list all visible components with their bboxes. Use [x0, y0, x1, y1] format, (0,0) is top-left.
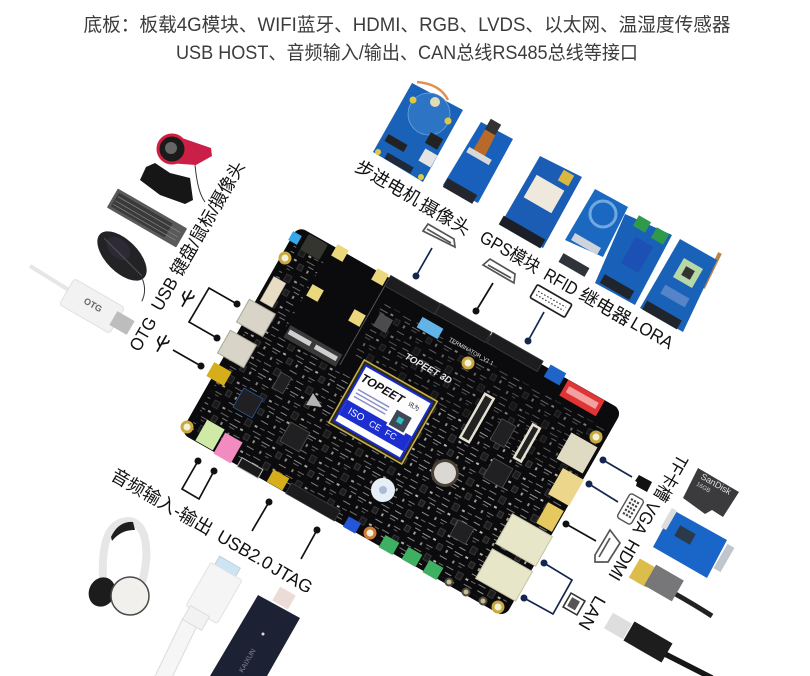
connector: camera header line and icon [412, 224, 455, 280]
connector: rfid header line and icon [524, 285, 572, 344]
icon: lan [563, 593, 585, 615]
label: USB 键盘/鼠标/摄像头: USB 键盘/鼠标/摄像头 [147, 158, 249, 314]
blue jumper [343, 516, 361, 534]
development board [180, 226, 622, 617]
pin header [237, 458, 263, 478]
label: JTAG: JTAG [268, 558, 316, 598]
tf socket [557, 433, 597, 473]
cpu core module: ISO [346, 406, 366, 424]
lan ports [476, 514, 552, 601]
board silk text [402, 337, 494, 387]
hdmi sockets [536, 468, 584, 532]
icon: tf card [635, 475, 652, 492]
peripheral: stepper motor board [373, 82, 463, 182]
connector: jtag line [301, 526, 320, 559]
mini pcie slot [283, 325, 343, 367]
label: GPS模块: GPS模块 [476, 227, 544, 277]
connector: otg line [173, 350, 204, 370]
cpu core module: TOPEET [358, 371, 408, 407]
sticker logo [417, 317, 443, 339]
connector: usb2.0 line [252, 498, 272, 531]
jtag socket [286, 483, 340, 521]
label: 音频输入-输出: 音频输入-输出 [108, 465, 216, 539]
mounting holes [182, 253, 601, 612]
green terminals [379, 535, 443, 580]
board pcb [180, 226, 622, 617]
fpc connectors [460, 394, 540, 461]
connector: usb bracket [189, 288, 240, 342]
connector: lan bracket [520, 560, 572, 614]
chips [233, 313, 516, 544]
audio jacks [195, 420, 243, 463]
peripheral: rfid board [559, 189, 628, 277]
warning triangle [306, 393, 322, 407]
fpc socket [260, 276, 286, 308]
cpu core module: CE [367, 418, 383, 433]
label: VGA: VGA [629, 498, 663, 538]
icon: usb symbol [178, 288, 196, 309]
label: 摄像头: 摄像头 [416, 195, 474, 239]
connector: audio bracket [182, 458, 218, 499]
connector: vga line [586, 480, 618, 502]
peripheral: sd card [683, 468, 739, 517]
label: USB2.0: USB2.0 [214, 526, 276, 574]
connector: tf line [600, 456, 632, 477]
usb ports [218, 299, 275, 368]
blue potentiometer [544, 364, 566, 386]
peripheral: hdmi dongle [210, 587, 300, 676]
peripheral: hdmi plug [629, 558, 712, 616]
board silk text: TERMINATOR_V1.1 [448, 337, 494, 367]
label: LAN: LAN [574, 592, 610, 634]
cpu core module: FC [383, 427, 399, 442]
peripheral: keyboard [107, 188, 187, 248]
peripheral: camera board [443, 119, 513, 204]
peripheral: hdmi dongle: KAIXUN [238, 648, 258, 674]
connector: gps header line and icon [472, 259, 515, 314]
label: OTG: OTG [125, 313, 161, 355]
title [84, 14, 730, 64]
peripheral: sd card: SanDisk [699, 471, 733, 497]
title: USB HOST、音频输入/输出、CAN总线RS485总线等接口 [176, 42, 638, 64]
label: TF卡槽: TF卡槽 [650, 451, 692, 505]
label: HDMI: HDMI [604, 536, 644, 584]
dc jack [300, 234, 328, 260]
peripheral: micro usb cable [162, 556, 242, 676]
peripheral: webcam [140, 135, 212, 204]
coin battery [431, 459, 459, 487]
title: 底板：板载4G模块、WIFI蓝牙、HDMI、RGB、LVDS、以太网、温湿度传感器 [84, 14, 730, 36]
peripheral: ethernet plug [604, 613, 712, 676]
peripheral: headphone [84, 521, 149, 615]
peripheral: otg cable [30, 266, 135, 335]
connector: hdmi line [562, 520, 596, 541]
top expansion headers [385, 275, 543, 372]
board silk text: TOPEET 3D [402, 351, 454, 387]
tactile buttons [446, 578, 486, 604]
label: LORA: LORA [627, 313, 677, 353]
peripheral: otg cable: OTG [82, 296, 104, 314]
buzzer [371, 478, 395, 502]
icon: usb symbol otg [153, 333, 171, 354]
peripheral: gps board [499, 156, 582, 248]
peripheral: vga board [653, 508, 734, 578]
peripheral: relay board [595, 214, 672, 305]
icon: vga [617, 493, 644, 525]
cpu core module: 讯为 [407, 400, 421, 413]
gold pads [306, 244, 389, 327]
red dip switch [559, 380, 605, 416]
cpu core module [329, 360, 437, 464]
label: 步进电机: 步进电机 [352, 156, 424, 210]
usb2.0 mini socket [267, 469, 289, 491]
peripheral: sd card: 16GB [695, 482, 711, 494]
sim marker [288, 231, 302, 245]
peripheral: lora board [640, 239, 720, 332]
label: 继电器: 继电器 [576, 284, 634, 330]
label: RFID: RFID [540, 264, 582, 300]
icon: hdmi [595, 530, 620, 562]
otg mini usb [206, 362, 232, 386]
peripheral: mouse [87, 223, 166, 301]
